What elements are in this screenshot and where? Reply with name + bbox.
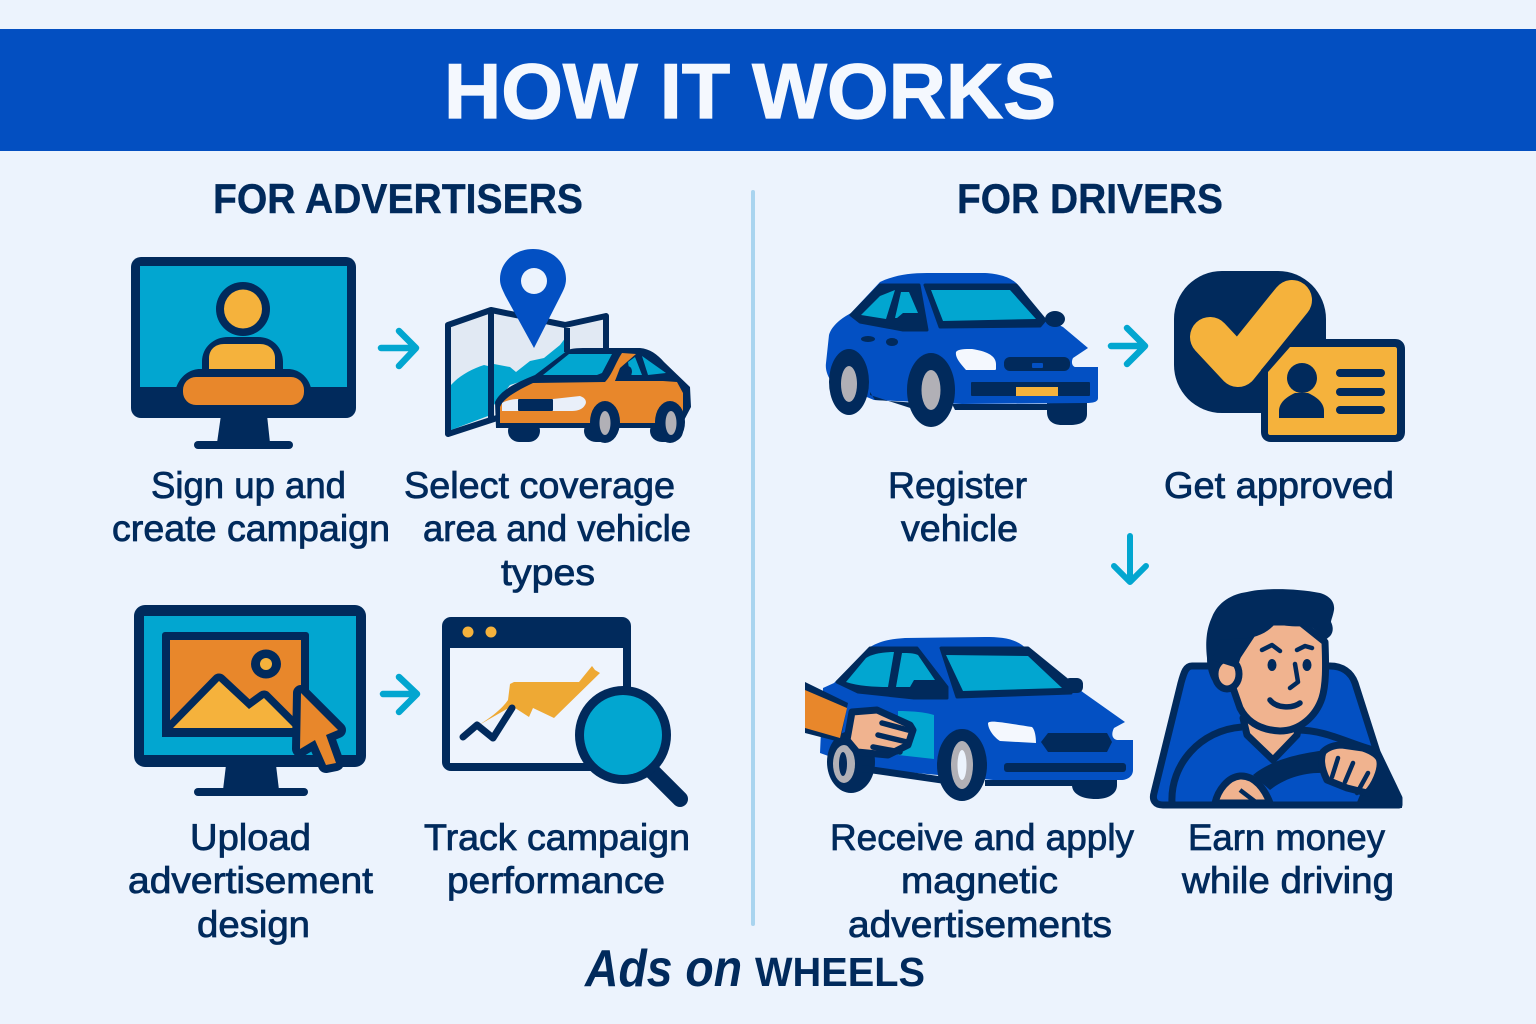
- label: select coverage: area and vehicle: [423, 508, 691, 549]
- label: track performance: performance: [447, 860, 665, 901]
- label: receive and apply: advertisements: [848, 904, 1112, 945]
- label: receive and apply: magnetic: [901, 860, 1058, 901]
- label: track performance: Track campaign: [424, 817, 690, 858]
- brand logo: ads on wheels: Ads on: [583, 940, 742, 998]
- label: sign up: Sign up and: [151, 465, 346, 506]
- label: receive and apply: [830, 817, 1134, 945]
- label: select coverage: [404, 465, 691, 593]
- label: select coverage: types: [501, 552, 595, 593]
- icon: monitor with image and cursor: [134, 605, 366, 796]
- heading: for drivers: FOR DRIVERS: [957, 175, 1223, 222]
- arrow: step three to four: [383, 677, 417, 712]
- icon: check mark and ID card: [1174, 271, 1405, 442]
- brand logo: ads on wheels: WHEELS: [755, 949, 925, 995]
- label: get approved: Get approved: [1164, 465, 1394, 506]
- title banner: HOW IT WORKS: [444, 47, 1056, 135]
- icon: blue car: [826, 273, 1098, 427]
- label: register vehicle: Register: [888, 465, 1027, 506]
- hand applying magnet: [805, 682, 913, 755]
- label: sign up: [112, 465, 390, 549]
- label: earn money: while driving: [1181, 860, 1394, 901]
- label: register vehicle: vehicle: [901, 508, 1018, 549]
- icon: analytics window with magnifier: [442, 617, 680, 799]
- icon: smiling driver at the wheel: [1153, 589, 1402, 808]
- label: earn money: [1181, 817, 1394, 901]
- label: receive and apply: Receive and apply: [830, 817, 1134, 858]
- icon: blue car receiving magnetic ad: [805, 637, 1133, 801]
- brand logo: ads on wheels: [583, 940, 925, 998]
- label: upload design: advertisement: [128, 860, 374, 901]
- label: sign up: create campaign: [112, 508, 390, 549]
- arrow: register to approved: [1111, 328, 1145, 364]
- icon: monitor with user: [131, 257, 356, 449]
- title banner: [0, 29, 1536, 151]
- label: register vehicle: [888, 465, 1027, 549]
- label: select coverage: Select coverage: [404, 465, 675, 506]
- label: upload design: design: [197, 904, 310, 945]
- arrow: step one to two: [381, 331, 416, 366]
- label: earn money: Earn money: [1188, 817, 1385, 858]
- panel: for advertisers: [112, 175, 691, 945]
- label: upload design: [128, 817, 374, 945]
- label: track performance: [424, 817, 690, 901]
- heading: for advertisers: FOR ADVERTISERS: [213, 175, 583, 222]
- arrow: approved to driver: [1114, 536, 1146, 582]
- icon: map pin and orange car: [448, 249, 691, 443]
- label: upload design: Upload: [190, 817, 311, 858]
- panel: for drivers: [805, 175, 1405, 945]
